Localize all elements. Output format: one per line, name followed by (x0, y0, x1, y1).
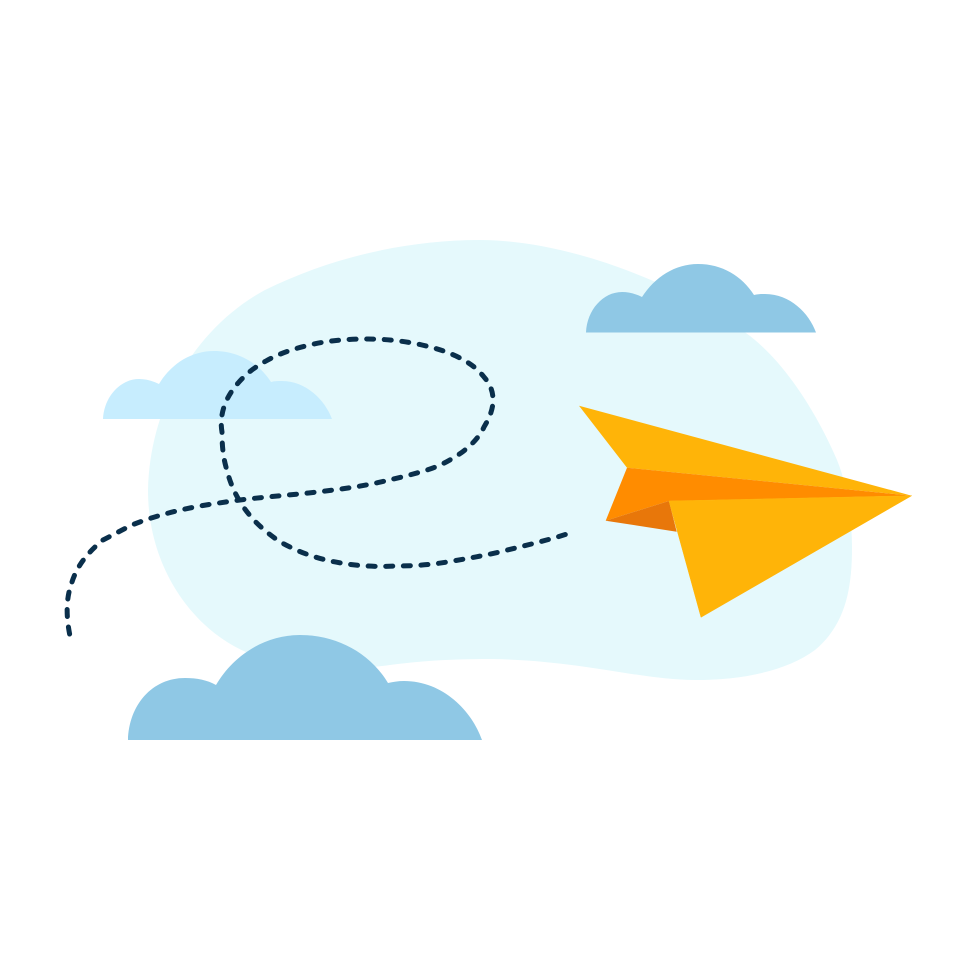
background blob (148, 240, 852, 680)
dashed flight path (67, 339, 567, 634)
plane: top wing (579, 406, 912, 496)
plane: dark fold (606, 501, 677, 532)
cloud: top right (586, 264, 816, 332)
plane: lower wing (669, 496, 912, 617)
paper plane (579, 406, 912, 617)
plane: inner fold (606, 468, 912, 521)
cloud: bottom large (128, 635, 482, 740)
cloud: left light (103, 351, 332, 419)
